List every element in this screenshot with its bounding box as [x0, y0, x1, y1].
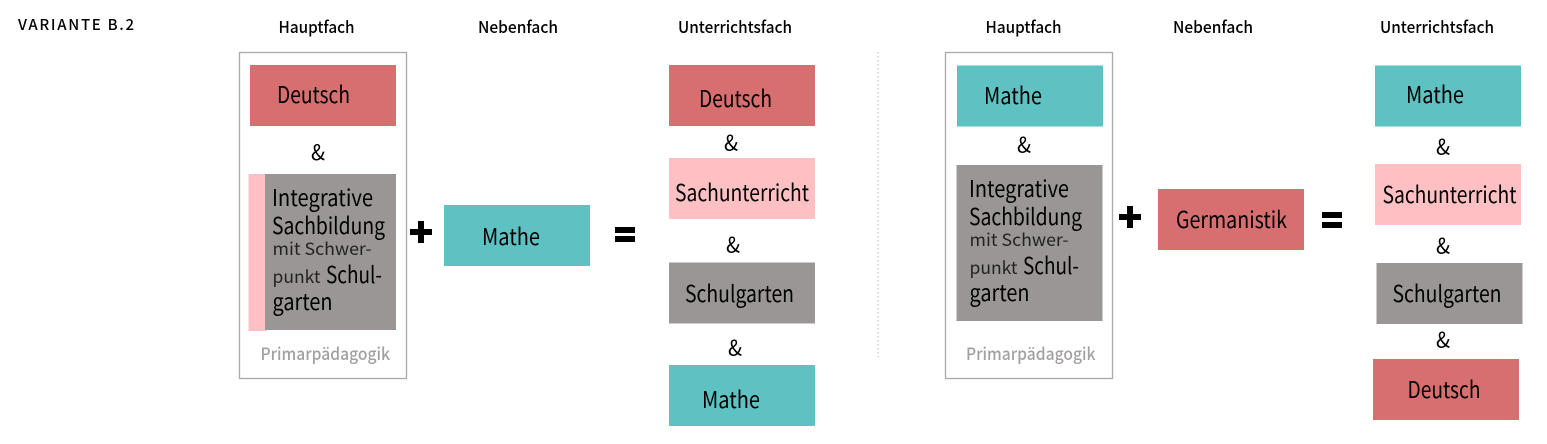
box: Integrative Sachbildung: mit Schwer- — [272, 235, 372, 260]
ampersand: & — [1017, 130, 1031, 160]
box: Deutsch — [669, 65, 815, 126]
heading: Unterrichtsfach: Unterrichtsfach — [678, 14, 792, 38]
heading: Nebenfach: Nebenfach — [478, 14, 558, 38]
box: Schulgarten — [1376, 263, 1522, 324]
panel: Hauptfach frame — [240, 52, 406, 378]
box: Mathe — [444, 205, 590, 266]
box: Germanistik — [1158, 189, 1304, 250]
box: Integrative Sachbildung — [248, 174, 396, 331]
equals sign — [615, 227, 635, 242]
box: Sachunterricht — [669, 158, 815, 219]
ampersand: & — [724, 128, 738, 158]
heading: Hauptfach: Hauptfach — [278, 14, 354, 38]
ampersand: & — [726, 230, 740, 260]
equals sign — [1322, 212, 1342, 228]
label: Primarpädagogik: Primarpädagogik — [260, 340, 390, 365]
left group: equation 1 — [240, 14, 815, 426]
box: Deutsch — [1373, 359, 1519, 420]
box: Integrative Sachbildung: punkt — [970, 254, 1018, 279]
box: Sachunterricht: Sachunterricht — [1382, 176, 1517, 210]
heading: Hauptfach: Hauptfach — [986, 14, 1062, 38]
box: Integrative Sachbildung: garten — [272, 283, 332, 317]
box: Integrative Sachbildung: Sachbildung — [272, 207, 385, 241]
box: Integrative Sachbildung: Schul- — [1023, 247, 1079, 281]
ampersand: & — [728, 332, 742, 362]
box: Integrative Sachbildung: mit Schwer- — [970, 226, 1069, 251]
panel: Hauptfach frame — [946, 52, 1112, 378]
ampersand: & — [1436, 132, 1450, 162]
box: Integrative Sachbildung: Integrative — [272, 179, 373, 213]
box: Schulgarten: Schulgarten — [685, 275, 794, 309]
ampersand: & — [311, 137, 325, 167]
ampersand: & — [1436, 324, 1450, 354]
plus sign — [1119, 206, 1141, 228]
right group: equation 2 — [946, 14, 1522, 420]
box: Deutsch — [250, 65, 396, 126]
box: Mathe: Mathe — [702, 381, 760, 415]
box: Integrative Sachbildung — [956, 165, 1102, 321]
box: Mathe — [957, 66, 1103, 126]
box: Deutsch: Deutsch — [1408, 371, 1480, 405]
label: Primarpädagogik: Primarpädagogik — [966, 340, 1096, 365]
box: Deutsch: Deutsch — [277, 76, 350, 110]
box: Integrative Sachbildung: punkt — [272, 263, 321, 288]
box: Sachunterricht — [1375, 164, 1521, 225]
box: Mathe: Mathe — [1406, 76, 1464, 110]
box: Integrative Sachbildung: Schul- — [326, 256, 382, 290]
box: Mathe: Mathe — [482, 218, 540, 252]
box: Germanistik: Germanistik — [1176, 201, 1287, 235]
heading: Nebenfach: Nebenfach — [1173, 14, 1253, 38]
box: Schulgarten: Schulgarten — [1392, 275, 1502, 309]
box: Integrative Sachbildung: garten — [970, 274, 1030, 308]
ampersand: & — [1436, 230, 1450, 260]
box: Schulgarten — [669, 262, 815, 324]
box: Mathe — [1375, 66, 1521, 126]
box: Integrative Sachbildung: Sachbildung — [969, 198, 1082, 232]
box: Mathe — [669, 365, 815, 426]
heading: Unterrichtsfach: Unterrichtsfach — [1380, 14, 1494, 38]
box: Mathe: Mathe — [984, 77, 1042, 111]
box: Integrative Sachbildung: Integrative — [969, 170, 1069, 204]
title: VARIANTE B.2 — [17, 14, 134, 35]
plus sign — [410, 221, 432, 243]
box: Deutsch: Deutsch — [699, 80, 772, 114]
divider — [877, 52, 879, 357]
box: Sachunterricht: Sachunterricht — [675, 174, 809, 208]
